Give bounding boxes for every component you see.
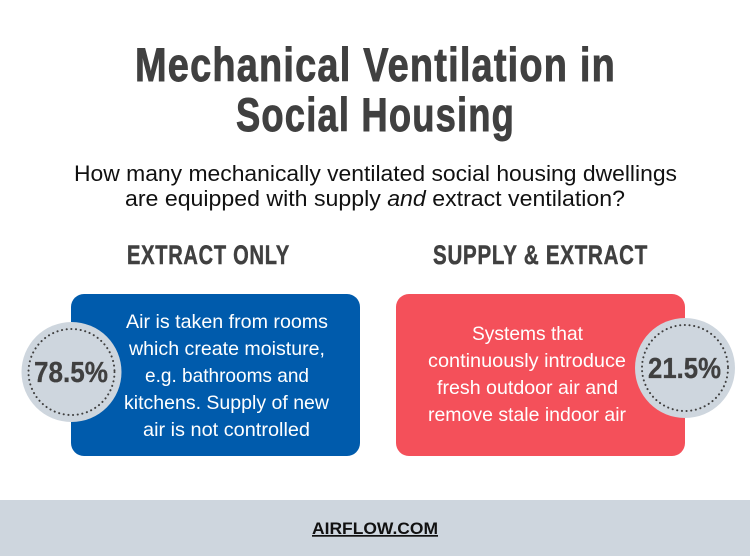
- extract only description: kitchens. Supply of new: [124, 392, 330, 414]
- heading: supply and extract: SUPPLY & EXTRACT: [433, 240, 648, 270]
- supply and extract description: continuously introduce: [428, 350, 626, 372]
- footer link text: AIRFLOW.COM: [312, 519, 438, 538]
- badge: 78.5%: 78.5%: [34, 357, 108, 389]
- extract only description: Air is taken from rooms: [126, 311, 328, 333]
- supply and extract description: remove stale indoor air: [428, 404, 627, 426]
- footer band: [0, 500, 750, 556]
- supply and extract description: fresh outdoor air and: [437, 377, 618, 399]
- supply and extract description: Systems that: [472, 323, 584, 345]
- badge: 21.5%: 21.5%: [648, 353, 721, 385]
- title: [135, 38, 616, 141]
- blue card: [71, 294, 360, 456]
- title: Mechanical Ventilation in: [135, 38, 616, 91]
- extract only description: [124, 311, 330, 441]
- panel: supply and extract: [396, 294, 735, 456]
- title: Social Housing: [236, 88, 515, 141]
- extract only description: e.g. bathrooms and: [145, 365, 309, 387]
- red card: [396, 294, 685, 456]
- badge: 21.5%: [635, 318, 735, 418]
- badge: 78.5%: [22, 322, 122, 422]
- subtitle question: are equipped with supply and extract ventilation?: [125, 186, 625, 211]
- extract only description: which create moisture,: [128, 338, 325, 360]
- subtitle question: How many mechanically ventilated social housing dwellings: [74, 161, 677, 186]
- extract only description: air is not controlled: [143, 419, 310, 441]
- heading: extract only: EXTRACT ONLY: [127, 240, 290, 270]
- subtitle question: [74, 161, 677, 211]
- supply and extract description: [428, 323, 627, 426]
- panel: extract only: [22, 294, 360, 456]
